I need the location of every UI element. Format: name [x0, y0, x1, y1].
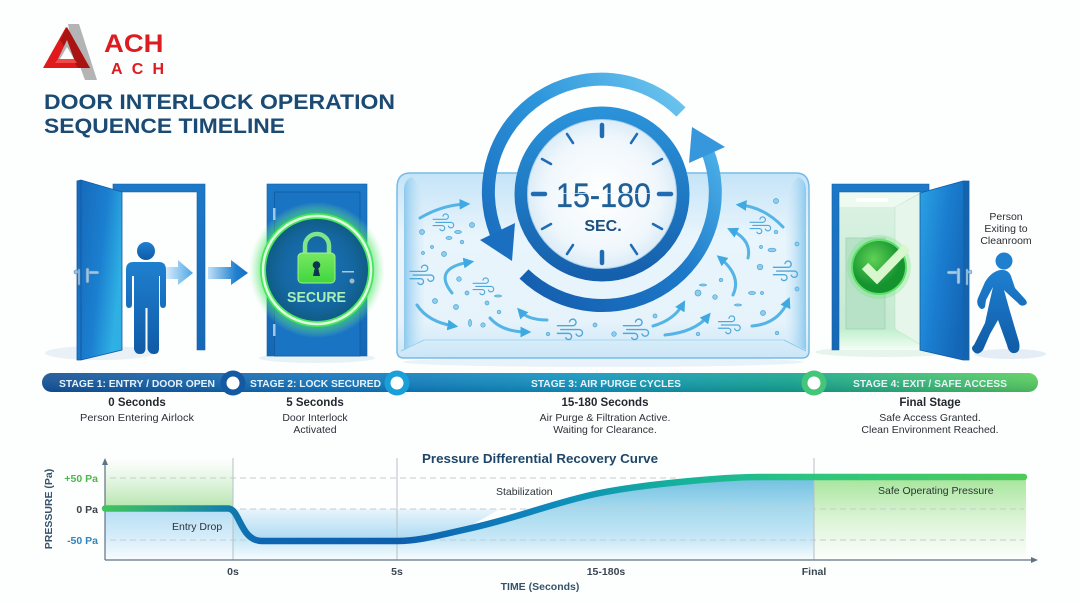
person exiting label: Person: [989, 211, 1023, 223]
x axis labels: Final: [802, 566, 826, 578]
circular arrow: top: [480, 79, 681, 261]
stage timeline bar: [42, 370, 1038, 396]
area fills: [105, 458, 1026, 560]
stage 2 illustration: secured door: [249, 184, 385, 363]
stage 3 description: 15-180 Seconds: [562, 397, 648, 409]
arrow between stage 1 and 2: [208, 260, 248, 285]
stage 2 description: 5 Seconds: [286, 397, 344, 409]
chart title: Pressure Differential Recovery Curve: [422, 452, 658, 466]
title: DOOR INTERLOCK OPERATION: [44, 90, 395, 114]
stage 4 description: Clean Environment Reached.: [861, 424, 999, 436]
person exiting label: Cleanroom: [980, 235, 1032, 247]
door handle: [342, 271, 354, 272]
x axis labels: 15-180s: [587, 566, 625, 578]
door handle: [74, 268, 99, 285]
air flow arrows: [417, 204, 788, 335]
clock face: SEC.: [584, 218, 622, 235]
stage labels: [59, 378, 1007, 390]
circular arrow: bottom: [524, 127, 725, 306]
y axis labels: 0 Pa: [76, 504, 98, 516]
stage 4 description: [861, 397, 999, 436]
grid lines: [110, 478, 1024, 540]
air particles: [420, 198, 799, 336]
door handle: [947, 268, 972, 285]
stage labels: STAGE 4: EXIT / SAFE ACCESS: [853, 378, 1007, 390]
stage labels: STAGE 1: ENTRY / DOOR OPEN: [59, 378, 215, 390]
axes: [102, 458, 1038, 563]
stage 3 illustration: air purge chamber: [397, 173, 809, 367]
person: [126, 242, 166, 354]
x axis title: TIME (Seconds): [501, 581, 579, 593]
stage 3 description: Waiting for Clearance.: [553, 424, 657, 436]
clock face: [521, 113, 683, 275]
y axis labels: +50 Pa: [64, 473, 98, 485]
node: stage 2 to 3: [384, 370, 410, 396]
pressure chart: [43, 452, 1038, 593]
person walking out: [972, 252, 1046, 359]
logo: ACH: [104, 30, 164, 58]
x axis labels: 0s: [227, 566, 239, 578]
green glow ring: [249, 202, 385, 338]
stage 1 description: [80, 397, 195, 424]
clock face: 15-180: [556, 177, 651, 215]
stage 3 description: [540, 397, 670, 436]
annotations: Stabilization: [496, 486, 553, 498]
stage 4 illustration: exit door with check: [815, 181, 972, 360]
stage 2 description: Door Interlock: [282, 412, 348, 424]
node: stage 3 to 4: [802, 370, 826, 396]
secure label: SECURE: [287, 290, 346, 306]
annotations: Entry Drop: [172, 521, 222, 533]
x axis labels: 5s: [391, 566, 403, 578]
stage 1 description: 0 Seconds: [108, 397, 166, 409]
wind icons: [410, 214, 797, 340]
stage 3 description: Air Purge & Filtration Active.: [540, 412, 670, 424]
stage labels: STAGE 2: LOCK SECURED: [250, 378, 381, 390]
stage 4 description: Safe Access Granted.: [879, 412, 981, 424]
x axis labels: [227, 566, 826, 578]
node: stage 1 to 2: [220, 370, 246, 396]
timer: circular arrows and clock: [480, 79, 725, 306]
stage 1 description: Person Entering Airlock: [80, 412, 195, 424]
check badge: [847, 235, 911, 299]
stage 2 description: Activated: [293, 424, 337, 436]
stage 1 illustration: open door with person entering: [45, 180, 205, 360]
stage 4 description: Final Stage: [899, 397, 961, 409]
title: SEQUENCE TIMELINE: [44, 114, 285, 138]
annotations: Safe Operating Pressure: [878, 485, 994, 497]
y axis labels: -50 Pa: [67, 535, 98, 547]
recovery curve: [105, 477, 1024, 541]
y axis title: PRESSURE (Pa): [43, 469, 55, 549]
person exiting label: Exiting to: [984, 223, 1028, 235]
padlock: [298, 234, 335, 283]
annotations: [172, 485, 994, 533]
title: [44, 90, 395, 138]
stage labels: STAGE 3: AIR PURGE CYCLES: [531, 378, 681, 390]
stage 2 description: [282, 397, 348, 436]
arrow out of doorway: [166, 260, 193, 285]
logo: ACH: [111, 61, 164, 78]
y axis labels: [64, 473, 98, 547]
logo: [43, 24, 164, 80]
person exiting label: [980, 211, 1032, 247]
